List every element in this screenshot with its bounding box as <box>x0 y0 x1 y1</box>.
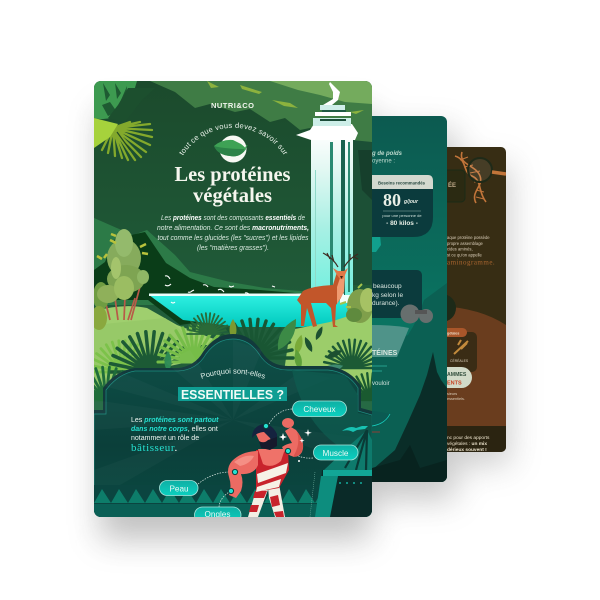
recommended needs box: g/jour <box>403 199 419 205</box>
bottom note: nc pour des apports <box>447 435 490 441</box>
dark forest <box>372 352 447 482</box>
intro paragraph: tout comme les glucides (les "sucres") et les lipides <box>158 235 309 242</box>
foreground ground <box>104 306 213 345</box>
bottom note: végétales : un mix <box>447 441 487 447</box>
tent top arc <box>372 414 390 432</box>
dashed connectors <box>198 409 313 507</box>
aminogramme text: propre assemblage <box>447 241 484 246</box>
bottom note: dérieux souvent ! <box>447 447 487 453</box>
athletes box: durance). <box>372 300 400 307</box>
intro text: g de poids <box>371 151 403 157</box>
strongman <box>228 418 303 517</box>
small note: essentiels. <box>447 397 465 401</box>
heading: essentielles: ESSENTIELLES ? <box>181 388 284 402</box>
plant sources box: gétales <box>447 332 459 336</box>
intro text <box>371 151 403 164</box>
recommended needs box <box>372 175 433 237</box>
main title <box>174 162 290 207</box>
pill: programmes: ENTS <box>447 380 462 386</box>
body: builder text: notamment un rôle de <box>131 435 199 442</box>
top left foliage <box>94 81 155 160</box>
athletes box: beaucoup <box>373 283 402 290</box>
arch panel <box>94 334 372 517</box>
body: builder text: dans notre corps, elles ont <box>131 426 218 433</box>
bush right <box>340 284 376 323</box>
head <box>256 430 272 447</box>
icon: leaf logo <box>214 136 247 162</box>
label box <box>447 170 466 202</box>
intro paragraph: Les protéines sont des composants essentiels de <box>161 215 305 222</box>
intro text: oyenne : <box>372 158 395 164</box>
label box: ÉE <box>448 181 456 189</box>
legs <box>248 487 269 517</box>
plant sources box: CÉRÉALES <box>450 358 469 363</box>
main title: végétales <box>193 183 272 207</box>
plant sources box <box>447 328 477 372</box>
deer <box>297 253 358 327</box>
birds <box>165 276 275 303</box>
teal blob <box>372 237 381 252</box>
pill: ongles <box>194 507 241 523</box>
middle card: besoins <box>372 116 447 482</box>
dark hill behind lake <box>94 232 300 325</box>
main title: Les protéines <box>174 162 290 186</box>
pill: cheveux <box>292 401 346 416</box>
aminogramme text: st ce qu'on appelle <box>447 252 482 258</box>
waterfall <box>296 82 358 305</box>
dna icon <box>455 152 486 203</box>
pill: programmes: AMMES <box>447 372 467 378</box>
back card: aminogramme <box>447 147 506 452</box>
recommended needs box: 80 <box>383 190 401 210</box>
body: builder text <box>131 417 219 454</box>
right dark cliff <box>352 140 372 285</box>
recommended needs box: Besoins recommandés <box>378 180 426 186</box>
curved subtitle: tout ce que vous devez savoir sur <box>179 122 288 155</box>
body: builder text: Les protéines sont partout <box>131 417 219 424</box>
proteins banner: vouloir <box>372 381 390 387</box>
card shadows <box>100 110 510 540</box>
title: why: Pourquoi sont-elles <box>200 368 266 379</box>
pill: muscle <box>314 445 358 460</box>
silhouette hill <box>372 283 447 482</box>
aminogramme text: aque protéine possède <box>447 235 490 240</box>
proteins banner <box>372 325 409 387</box>
big wheel shade <box>292 370 372 444</box>
pill: programmes <box>447 367 472 388</box>
triangle bunting <box>94 485 372 517</box>
small note: sieurs <box>447 392 457 396</box>
brand: NUTRI&CO <box>211 101 254 110</box>
pill: peau <box>160 480 198 496</box>
intro paragraph: notre alimentation. Ce sont des macronutriments, <box>157 225 309 232</box>
recommended needs box: - 80 kilos - <box>386 220 418 227</box>
athletes box: kg selon le <box>372 292 403 299</box>
small note <box>447 392 465 400</box>
icon: dumbbell <box>400 304 433 324</box>
circus tent <box>310 426 372 517</box>
mountains top <box>150 81 372 145</box>
intro paragraph: (les "matières grasses"). <box>197 245 269 252</box>
magnifier icon <box>468 158 506 182</box>
left arm <box>228 451 258 498</box>
recommended needs box: pour une personne de <box>382 213 422 218</box>
front card <box>94 81 372 517</box>
right arm <box>282 427 303 457</box>
dark circle <box>447 295 456 321</box>
pill: cheveux: Cheveux <box>303 405 336 414</box>
sun rays <box>94 340 372 500</box>
pill: ongles: Ongles <box>205 510 230 519</box>
proteins banner: TÉINES <box>372 348 398 357</box>
brown hill <box>447 308 506 426</box>
lake <box>150 296 348 327</box>
mid hill <box>94 218 312 305</box>
pill: muscle: Muscle <box>323 449 349 458</box>
torso <box>256 449 289 492</box>
intro paragraph <box>157 215 309 252</box>
aminogramme text <box>447 235 495 266</box>
hotspots <box>228 423 291 494</box>
athletes box <box>372 270 422 318</box>
body: builder text: bâtisseur. <box>131 442 178 454</box>
pill: peau: Peau <box>169 484 189 494</box>
bottom note <box>447 436 490 451</box>
aminogramme text: aminogramme. <box>447 258 495 266</box>
jungle foliage <box>94 312 372 402</box>
aminogramme text: cides aminés, <box>447 246 473 252</box>
sparkles <box>279 429 312 462</box>
left tree <box>91 229 149 330</box>
